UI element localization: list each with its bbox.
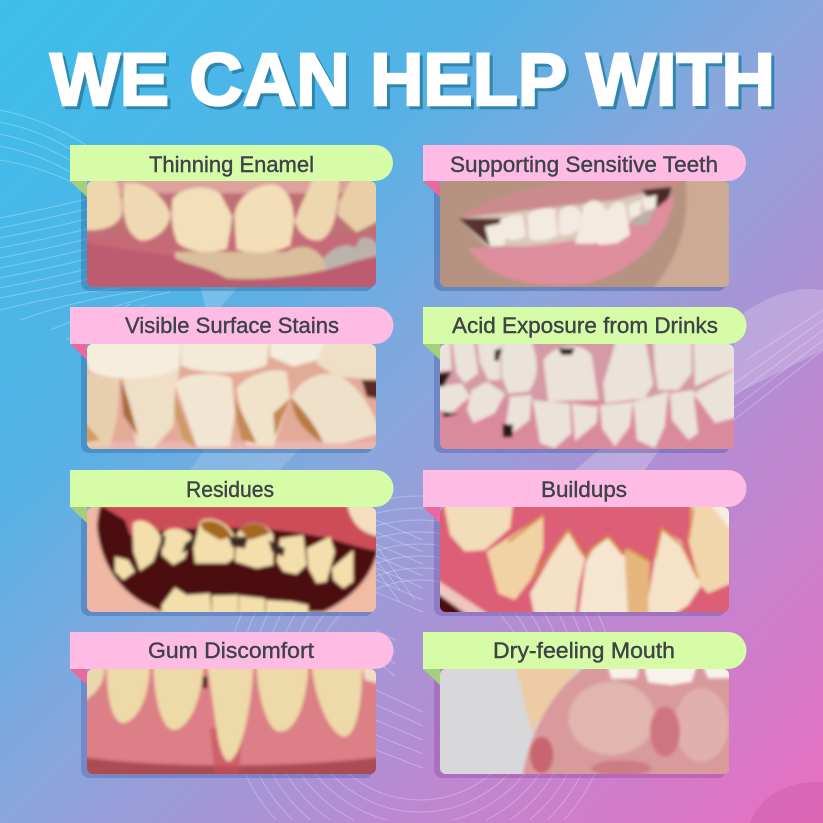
label fold bbox=[423, 669, 440, 685]
panel: Acid Exposure from Drinks bbox=[423, 307, 746, 453]
panel: Thinning Enamel bbox=[70, 145, 393, 295]
panel: Visible Surface Stains bbox=[70, 307, 394, 457]
photo: dry tongue bbox=[440, 669, 729, 774]
banner bbox=[70, 307, 394, 344]
label fold bbox=[423, 344, 440, 360]
label fold bbox=[70, 669, 87, 685]
photo: teeth with yellow buildup bbox=[440, 507, 729, 612]
banner bbox=[70, 632, 394, 669]
photo: smiling mouth bbox=[440, 181, 729, 287]
label fold bbox=[423, 181, 440, 197]
panel: Residues bbox=[70, 470, 394, 618]
heading: Residues bbox=[186, 477, 274, 502]
banner bbox=[70, 470, 394, 507]
photo: stained lower teeth bbox=[87, 344, 376, 449]
title: WE CAN HELP WITH bbox=[53, 41, 778, 124]
panel: Supporting Sensitive Teeth bbox=[423, 145, 746, 295]
label fold bbox=[70, 507, 87, 523]
heading: Visible Surface Stains bbox=[125, 313, 339, 338]
heading: Thinning Enamel bbox=[149, 152, 314, 177]
banner bbox=[423, 632, 746, 669]
heading: Dry-feeling Mouth bbox=[493, 638, 675, 663]
banner bbox=[423, 307, 746, 344]
photo: open mouth with decayed teeth bbox=[87, 507, 376, 612]
panel: Dry-feeling Mouth bbox=[423, 632, 746, 782]
label fold bbox=[70, 344, 87, 360]
photo: receding gums bbox=[87, 669, 376, 774]
heading: Supporting Sensitive Teeth bbox=[450, 152, 718, 177]
banner bbox=[423, 145, 746, 181]
panel: Buildups bbox=[423, 470, 746, 618]
photo: eroded teeth bbox=[435, 338, 740, 449]
heading: Gum Discomfort bbox=[148, 638, 314, 663]
banner bbox=[70, 145, 393, 181]
label fold bbox=[423, 507, 440, 523]
banner bbox=[423, 470, 746, 507]
panel: Gum Discomfort bbox=[70, 632, 394, 782]
heading: Acid Exposure from Drinks bbox=[452, 313, 718, 338]
heading: Buildups bbox=[541, 477, 627, 502]
label fold bbox=[70, 181, 87, 197]
title: WE CAN HELP WITH bbox=[50, 38, 775, 121]
photo: thinning enamel teeth bbox=[87, 181, 376, 287]
